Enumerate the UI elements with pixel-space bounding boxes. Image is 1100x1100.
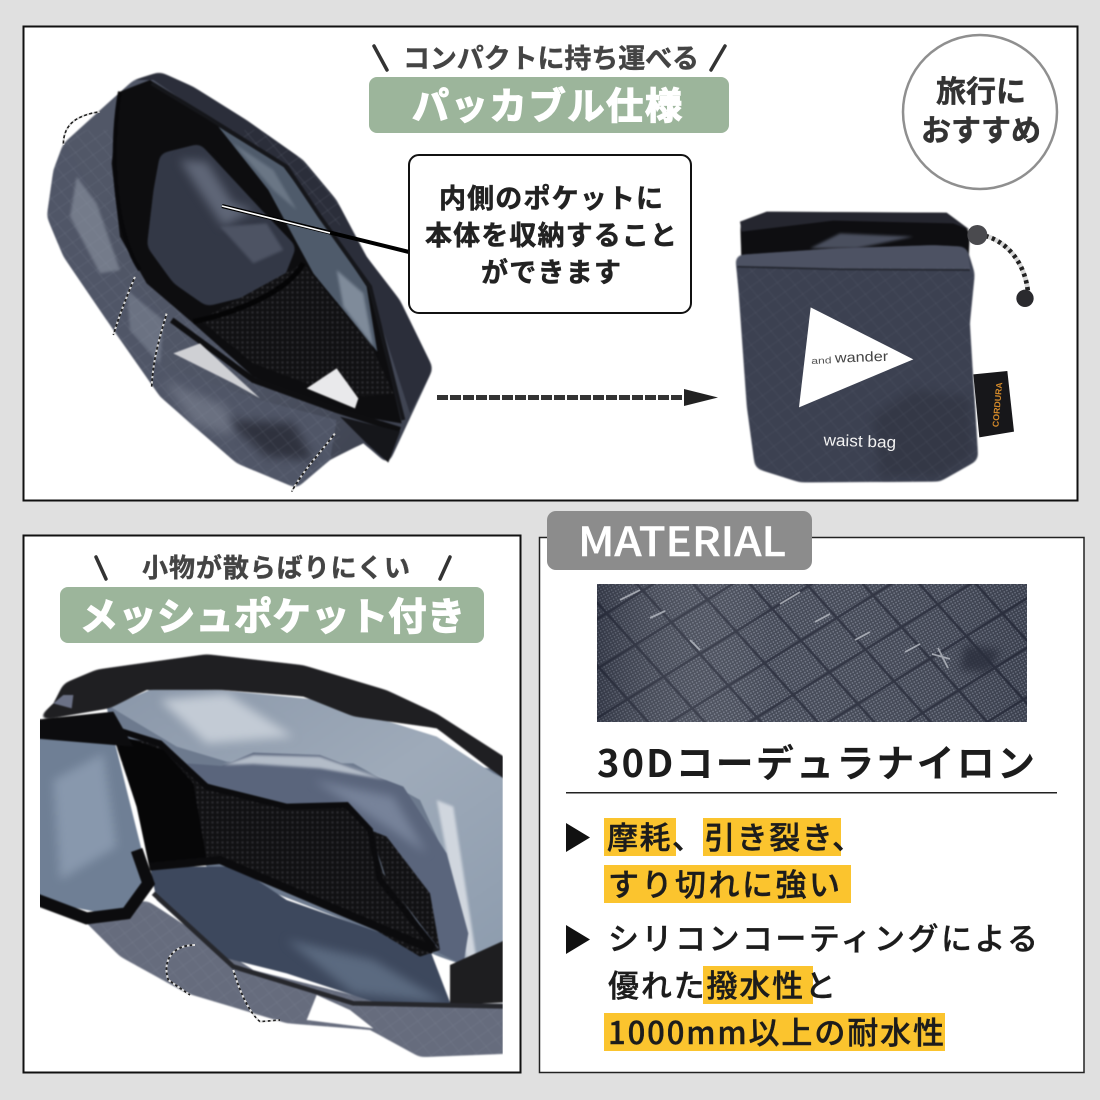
badge: recommended for travel: おすすめ bbox=[921, 106, 1041, 150]
panel: material bbox=[540, 510, 1084, 1072]
photo: open bag bbox=[40, 72, 433, 497]
photo: stuffed pouch: and bbox=[811, 355, 832, 366]
feature: abrasion resistance: 摩耗、引き裂き、 bbox=[607, 813, 863, 858]
photo: stuffed pouch: waist bag bbox=[822, 431, 896, 452]
arrow: dashed bbox=[437, 389, 718, 406]
photo: stuffed pouch: wander bbox=[833, 348, 889, 366]
feature: abrasion resistance bbox=[566, 813, 863, 905]
feature: water repellency bbox=[566, 914, 1038, 1053]
feature: water repellency: 優れた撥水性と bbox=[608, 961, 836, 1006]
callout: inner pocket: 内側のポケットに bbox=[439, 177, 663, 216]
photo: stuffed pouch: CORDURA bbox=[990, 381, 1004, 428]
callout: inner pocket: ができます bbox=[481, 251, 621, 290]
feature: water repellency: シリコンコーティングによる bbox=[608, 914, 1038, 959]
badge: recommended for travel: 旅行に bbox=[936, 67, 1026, 111]
heading: material name: 30Dコーデュラナイロン bbox=[597, 733, 1035, 788]
heading: small items: 小物が散らばりにくい bbox=[142, 548, 410, 585]
photo: stuffed pouch bbox=[733, 212, 1034, 484]
callout: inner pocket bbox=[409, 155, 691, 313]
photo: bag interior bbox=[33, 654, 520, 1060]
heading: compact: コンパクトに持ち運べる bbox=[403, 37, 699, 76]
feature: water repellency: 1000mm以上の耐水性 bbox=[608, 1008, 944, 1053]
heading: packable band: パッカブル仕様 bbox=[412, 76, 682, 130]
tab: MATERIAL bbox=[547, 510, 812, 570]
heading: mesh pocket band: メッシュポケット付き bbox=[80, 586, 465, 641]
leader line bbox=[222, 206, 409, 252]
tab: MATERIAL: MATERIAL bbox=[578, 510, 786, 568]
callout: inner pocket: 本体を収納すること bbox=[425, 214, 677, 253]
feature: abrasion resistance: すり切れに強い bbox=[608, 860, 840, 905]
panel: packable bbox=[24, 26, 1078, 500]
panel: mesh pocket bbox=[24, 536, 520, 1072]
badge: recommended for travel bbox=[903, 35, 1057, 189]
photo: fabric swatch bbox=[597, 584, 1027, 722]
